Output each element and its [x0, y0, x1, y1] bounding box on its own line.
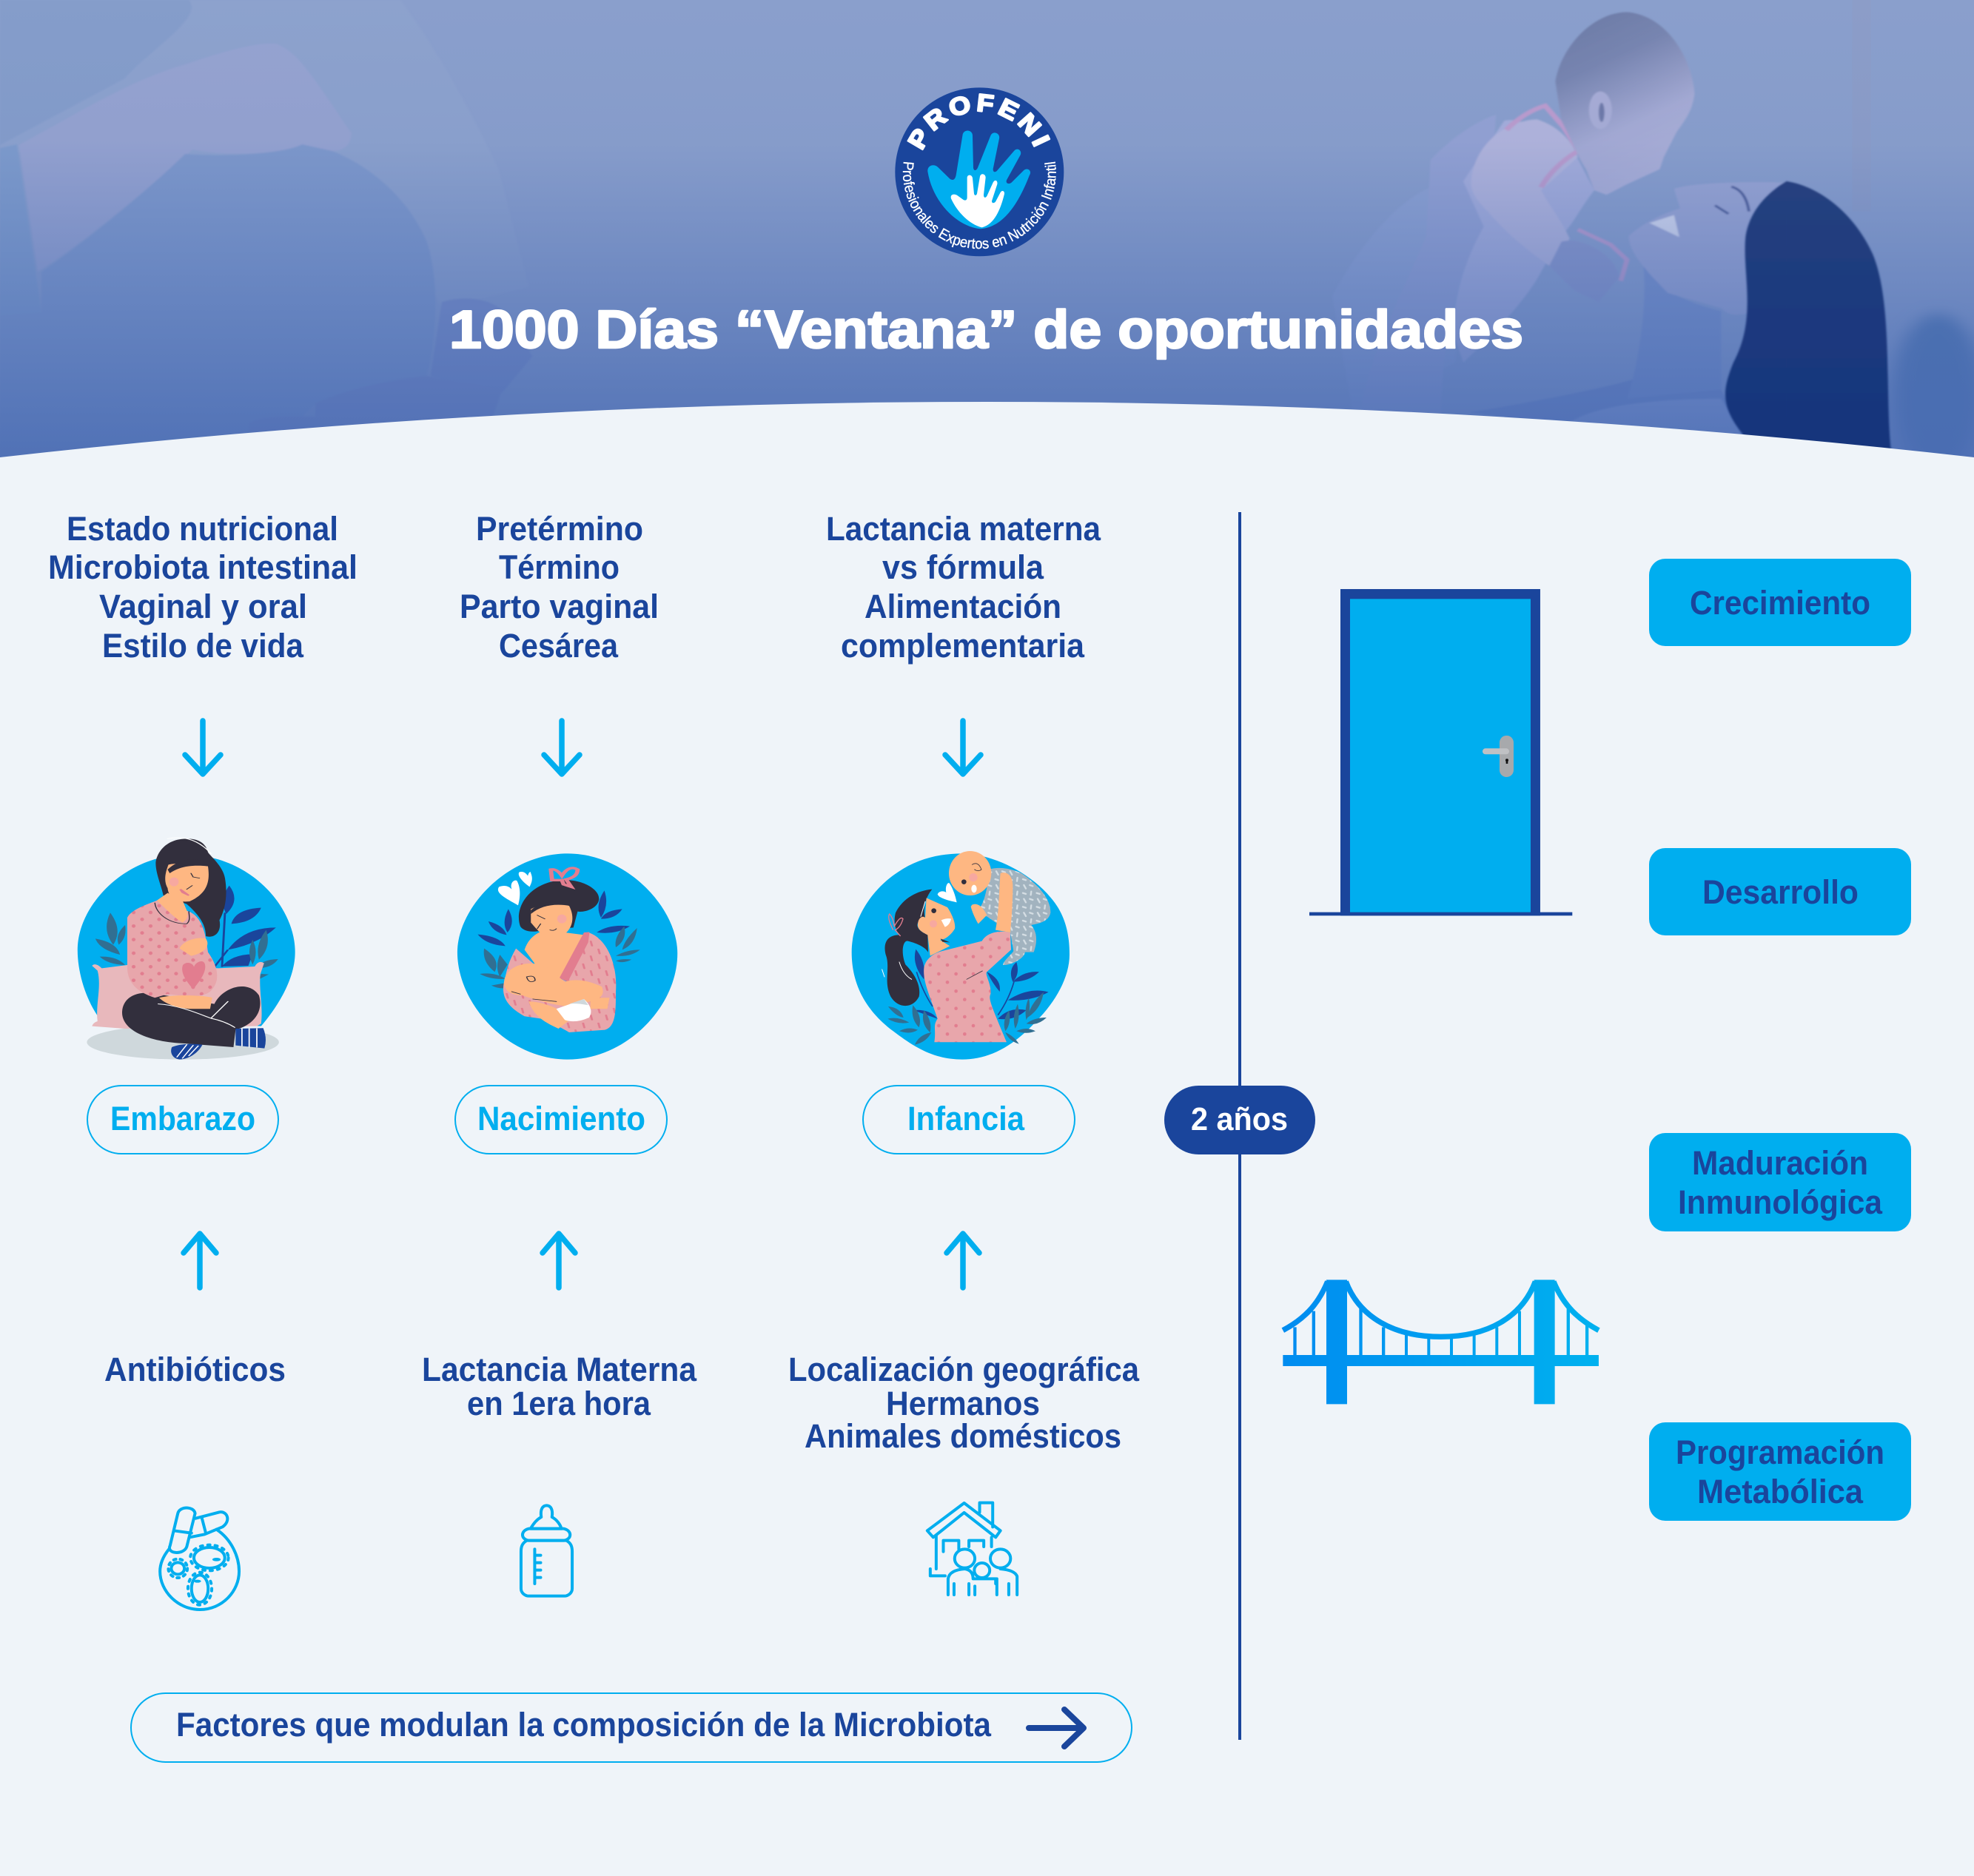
title: 1000 Días “Ventana” de oportunidades: [449, 300, 1523, 360]
column 2 factors: Cesárea: [499, 627, 619, 665]
factor text: Localización: [788, 1351, 1140, 1455]
icon: house and family: [927, 1503, 1017, 1595]
stage pill: Nacimiento: [455, 1086, 667, 1154]
column 3 factors: Alimentación: [865, 588, 1061, 625]
factor text: Antibióticos: Antibióticos: [104, 1351, 286, 1388]
pill: 2 años: 2 años: [1191, 1101, 1288, 1137]
outcome: Programación Metabólica: [1649, 1422, 1911, 1521]
outcome: Programación Metabólica: Programación: [1676, 1433, 1884, 1471]
logo hand: child: [951, 174, 1004, 227]
outcome: Desarrollo: Desarrollo: [1702, 873, 1859, 911]
factor text: Lactancia Materna: en 1era hora: [467, 1385, 651, 1422]
stage pill: Embarazo: [87, 1086, 278, 1154]
outcome: Maduración Inmunológica: Inmunológica: [1678, 1183, 1883, 1221]
factor text: Lactancia Materna: Lactancia Materna: [422, 1351, 697, 1388]
illustration: infancy: [852, 851, 1070, 1060]
column 1 factors: [48, 510, 357, 665]
outcome: Desarrollo: [1649, 848, 1911, 935]
column 2 factors: Pretérmino: [476, 510, 643, 548]
outcome: Maduración Inmunológica: Maduración: [1692, 1144, 1868, 1182]
stage pill: Infancia: [863, 1086, 1075, 1154]
logo tagline: Profesionales Expertos en Nutrición Infantil: [903, 161, 1056, 249]
blue overlay: [0, 0, 1974, 474]
icon: door: [1309, 589, 1572, 915]
column 2 factors: Término: [499, 548, 620, 586]
bottom pill: modulating factors: Factores que modulan la composición de la Microbiota: [176, 1706, 992, 1744]
column 3 factors: complementaria: [841, 627, 1085, 665]
pillow: [92, 962, 264, 1029]
column 1 factors: Estilo de vida: [102, 627, 304, 665]
stage pill: Embarazo: Embarazo: [110, 1100, 255, 1137]
illustration: pregnancy: [78, 838, 295, 1060]
outcome: Crecimiento: [1649, 559, 1911, 646]
outcome: Crecimiento: Crecimiento: [1690, 584, 1870, 622]
column 1 factors: Microbiota intestinal: [48, 548, 357, 586]
icon: suspension bridge: [1283, 1280, 1599, 1404]
outcome: Programación Metabólica: Metabólica: [1697, 1473, 1864, 1510]
factor text: Lactancia Materna: [422, 1351, 697, 1422]
column 3 factors: vs fórmula: [882, 548, 1044, 586]
factor text: Localización: Hermanos: [886, 1385, 1040, 1422]
column 2 factors: [460, 510, 659, 665]
bottom pill: modulating factors: [131, 1693, 1132, 1762]
logo: PROFENI: [895, 87, 1064, 256]
illustration: breastfeeding: [457, 853, 677, 1060]
pill: 2 años: [1164, 1086, 1315, 1154]
timeline vertical line: [1238, 512, 1241, 1740]
outcome: Maduración Inmunológica: [1649, 1133, 1911, 1231]
header photo banner: [0, 0, 1974, 474]
column 3 factors: [826, 510, 1101, 665]
icon: baby bottle: [521, 1505, 572, 1596]
icon: antibiotics: [160, 1507, 239, 1610]
column 1 factors: Vaginal y oral: [99, 588, 307, 625]
mother's hair: [1725, 181, 1891, 450]
logo name: PROFENI: [907, 93, 1051, 151]
photo: pregnant belly: [0, 0, 532, 463]
column 1 factors: Estado nutricional: [67, 510, 338, 548]
down arrows: [185, 721, 981, 774]
up arrows: [184, 1234, 979, 1288]
logo hand: adult: [927, 130, 1030, 229]
curved content panel: [0, 402, 1974, 1876]
stage pill: Infancia: Infancia: [907, 1100, 1025, 1137]
photo: mother and baby: [1332, 0, 1974, 471]
column 3 factors: Lactancia materna: [826, 510, 1101, 548]
arrow: right: [1029, 1709, 1084, 1746]
column 2 factors: Parto vaginal: [460, 588, 659, 625]
stage pill: Nacimiento: Nacimiento: [477, 1100, 645, 1137]
factor text: Localización: Animales domésticos: [805, 1417, 1121, 1455]
factor text: Localización: Localización geográfica: [788, 1351, 1140, 1388]
